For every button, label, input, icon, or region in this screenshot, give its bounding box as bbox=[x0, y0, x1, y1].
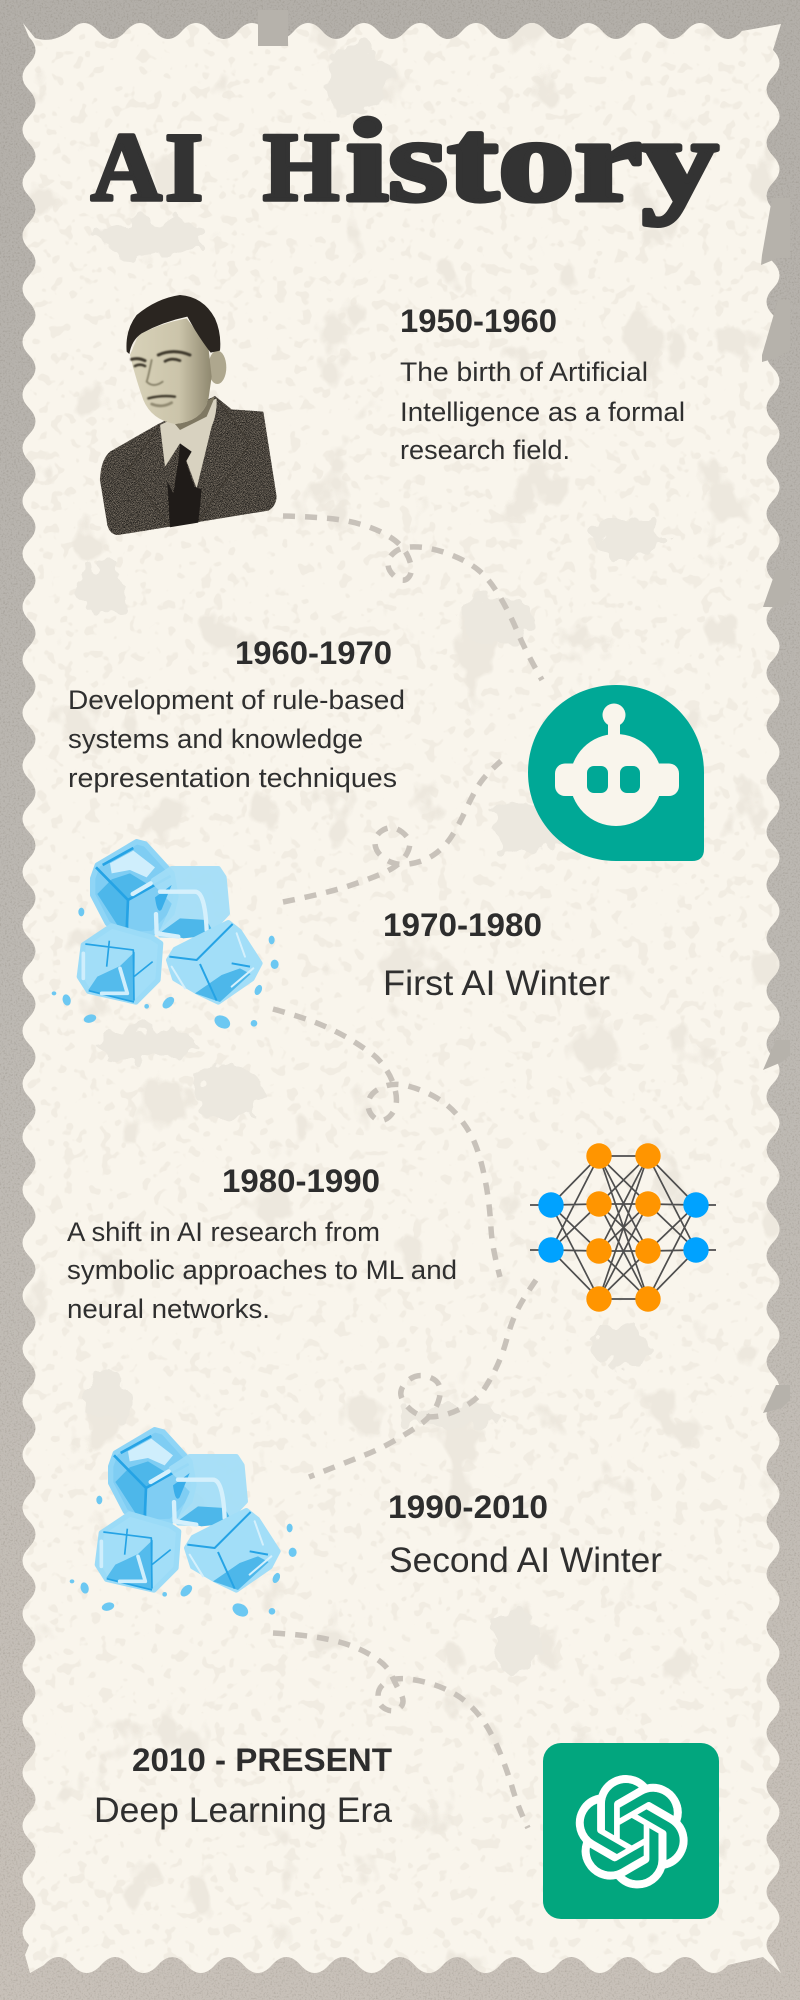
vest and tie bbox=[167, 443, 202, 527]
block: 1990-2010 bbox=[388, 1489, 662, 1580]
block: 1950-1960: research field. bbox=[400, 435, 570, 465]
block: 1950-1960: Intelligence as a formal bbox=[400, 397, 685, 427]
icon: knot logo bbox=[543, 1743, 719, 1919]
dashed path 3 bbox=[273, 1009, 500, 1277]
block: 1960-1970: representation techniques bbox=[68, 763, 397, 793]
icon: neural network bbox=[530, 1143, 716, 1312]
jacket bbox=[100, 396, 277, 535]
block: 1980-1990: neural networks. bbox=[67, 1294, 270, 1324]
block: 2010 - present: Deep Learning Era bbox=[94, 1791, 393, 1830]
facial features bbox=[132, 352, 190, 406]
icon: ice cubes 1 bbox=[52, 842, 279, 1031]
block: 1960-1970: 1960-1970 bbox=[235, 635, 392, 671]
icon: robot bbox=[528, 685, 704, 861]
title: istory bbox=[346, 95, 718, 226]
block: 1970-1980: 1970-1980 bbox=[383, 907, 542, 943]
icon: ice cubes 2 bbox=[70, 1430, 297, 1619]
block: 1980-1990: A shift in AI research from bbox=[67, 1217, 380, 1247]
block: 2010 - present: 2010 - PRESENT bbox=[132, 1742, 392, 1778]
connections bbox=[530, 1156, 716, 1299]
dashed path 1 bbox=[283, 516, 542, 680]
hidden nodes bbox=[586, 1143, 661, 1312]
block: 1960-1970: Development of rule-based bbox=[68, 685, 405, 715]
block: 1960-1970 bbox=[68, 635, 405, 793]
ear bbox=[208, 351, 226, 384]
block: 1980-1990: symbolic approaches to ML and bbox=[67, 1255, 457, 1285]
hair bbox=[126, 295, 220, 354]
portrait: Alan Turing bbox=[100, 295, 277, 535]
block: 1960-1970: systems and knowledge bbox=[68, 724, 363, 754]
torn seams on the paper edge bbox=[258, 10, 790, 1413]
block: 1970-1980 bbox=[383, 907, 610, 1003]
block: 1950-1960: The birth of Artificial bbox=[400, 357, 648, 387]
block: 1970-1980: First AI Winter bbox=[383, 964, 610, 1003]
block: 1980-1990 bbox=[67, 1163, 457, 1324]
dashed path 4 bbox=[309, 1280, 536, 1477]
input and output nodes bbox=[538, 1192, 709, 1263]
shirt bbox=[160, 398, 217, 488]
block: 1990-2010: 1990-2010 bbox=[388, 1489, 548, 1525]
block: 2010 - present bbox=[94, 1742, 393, 1830]
face bbox=[130, 318, 212, 424]
block: 1950-1960 bbox=[400, 303, 685, 465]
lapels bbox=[128, 398, 250, 527]
dashed path 5 bbox=[273, 1633, 528, 1828]
title: H bbox=[263, 114, 339, 222]
block: 1980-1990: 1980-1990 bbox=[222, 1163, 380, 1199]
dashed path 2 bbox=[283, 761, 501, 902]
title: AI bbox=[91, 114, 203, 222]
neck shadow bbox=[175, 397, 215, 430]
block: 1950-1960: 1950-1960 bbox=[400, 303, 557, 339]
block: 1990-2010: Second AI Winter bbox=[389, 1541, 662, 1580]
